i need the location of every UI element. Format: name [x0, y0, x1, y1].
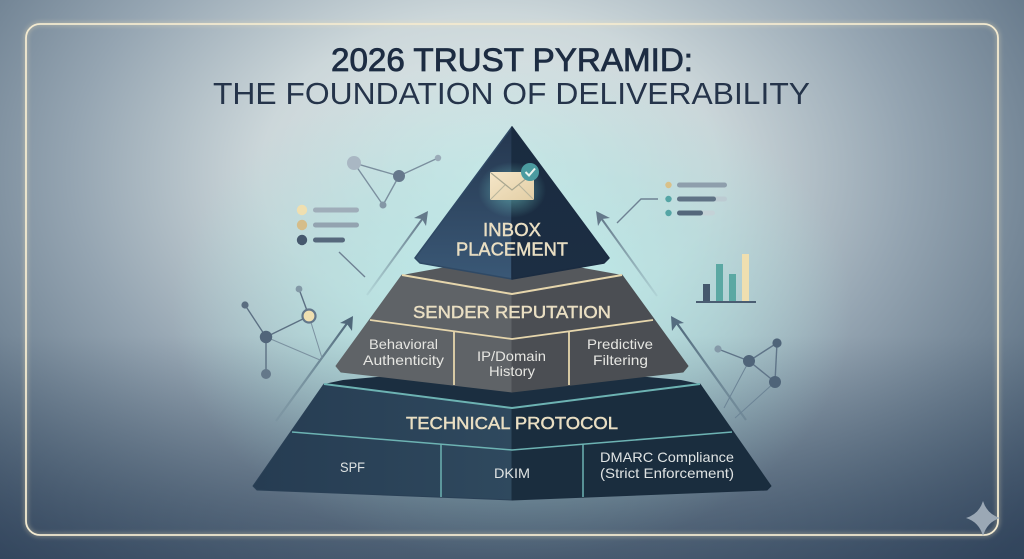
network icon: lower left	[241, 286, 322, 379]
title line 2: THE FOUNDATION OF DELIVERABILITY	[213, 76, 810, 111]
envelope glow	[478, 162, 546, 218]
tier 1 faces	[415, 127, 609, 279]
title line 1: 2026 TRUST PYRAMID:	[331, 42, 693, 78]
icon: sparkle watermark	[966, 501, 1000, 536]
network icon: upper left	[347, 155, 441, 208]
tier 3 cell: DKIM: DKIM	[494, 465, 530, 481]
tier 1 label: INBOX	[483, 219, 541, 240]
icon: check badge	[521, 163, 539, 181]
tier 2 cell: IP/Domain	[477, 348, 546, 379]
list icon: right	[617, 182, 727, 223]
arrow: lower left	[276, 316, 353, 421]
tier 3 lines	[292, 384, 732, 497]
tier 2 cell: IP/Domain: IP/Domain	[477, 348, 546, 364]
tier 2 heading: SENDER REPUTATION	[413, 302, 611, 322]
tier 3: technical protocol	[253, 365, 771, 500]
arrow: upper left	[367, 211, 428, 295]
tier 3 cell: DMARC	[600, 449, 734, 481]
tier 2 cell: predictive	[587, 336, 653, 368]
arrow: lower right	[671, 316, 746, 420]
list icon: left	[297, 205, 365, 277]
tier 2 cell: behavioral: Behavioral	[369, 336, 438, 352]
network icon: lower right	[714, 338, 782, 418]
tier 3 cell: DMARC: (Strict Enforcement)	[600, 465, 734, 481]
tier 2 cell: behavioral	[363, 336, 444, 368]
tier 2 cell: predictive: Filtering	[593, 352, 648, 368]
tier 3 heading: TECHNICAL PROTOCOL	[406, 413, 618, 433]
title	[213, 42, 810, 111]
tier 3 cell: DMARC: DMARC Compliance	[600, 449, 734, 465]
tier 2 cell: predictive: Predictive	[587, 336, 653, 352]
tier 2 cell: behavioral: Authenticity	[363, 352, 444, 368]
tier 2 faces	[336, 255, 688, 392]
icon: envelope	[490, 172, 534, 200]
tier 1: inbox placement	[415, 127, 609, 279]
arrow: upper right	[596, 211, 657, 296]
tier 3 cell: SPF: SPF	[340, 459, 365, 475]
tier 3 faces	[253, 365, 771, 500]
bar chart	[696, 254, 756, 303]
tier 2: sender reputation	[336, 255, 688, 392]
tier 1 label: PLACEMENT	[456, 238, 568, 260]
tier 1 label	[456, 219, 568, 260]
tier 2 cell: IP/Domain: History	[489, 363, 535, 379]
tier 2 lines	[370, 275, 653, 385]
